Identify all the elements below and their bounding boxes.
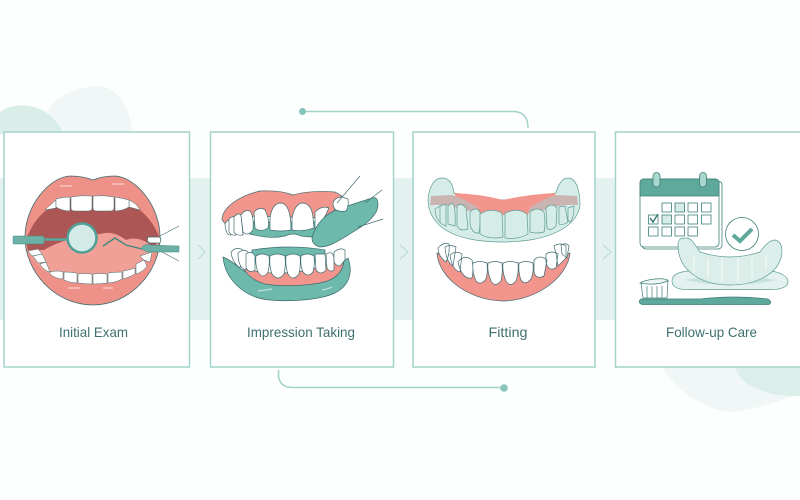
- label: Fitting: [488, 324, 528, 340]
- illustration: open mouth: [25, 176, 179, 305]
- icon: calendar: [640, 172, 722, 249]
- panel: impression taking: [210, 132, 394, 367]
- illustration: lower denture: [437, 244, 570, 301]
- background blob: bottom right: [662, 367, 800, 412]
- card frame: [4, 132, 190, 367]
- label: Follow-up Care: [666, 324, 757, 340]
- arrow: step 1 to 2: [198, 245, 205, 259]
- icon: check badge: [726, 218, 758, 250]
- label: Initial Exam: [59, 324, 128, 340]
- panel: fitting: [413, 132, 595, 367]
- illustration: aligner on pad: [672, 238, 788, 290]
- connector: bottom: [278, 370, 508, 392]
- icon: dental mirror: [13, 224, 96, 252]
- background blob: top left: [0, 86, 132, 135]
- connector: top: [299, 108, 528, 128]
- icon: toothbrush: [639, 279, 771, 304]
- icon: dental probe: [103, 238, 179, 252]
- icon: finger with impression tray: [312, 176, 383, 247]
- panel: follow-up care: [616, 132, 800, 367]
- arrow: step 2 to 3: [400, 245, 408, 259]
- arrow: step 3 to 4: [603, 245, 611, 259]
- illustration: lower tray and teeth: [223, 247, 350, 301]
- background band: [0, 178, 800, 320]
- label: Impression Taking: [247, 324, 355, 340]
- card frame: [616, 132, 800, 367]
- illustration: upper gum and clear tray: [428, 178, 580, 242]
- illustration: upper teeth: [222, 191, 342, 237]
- card frame: [210, 132, 394, 367]
- card frame: [413, 132, 595, 367]
- panel: initial exam: [4, 132, 190, 367]
